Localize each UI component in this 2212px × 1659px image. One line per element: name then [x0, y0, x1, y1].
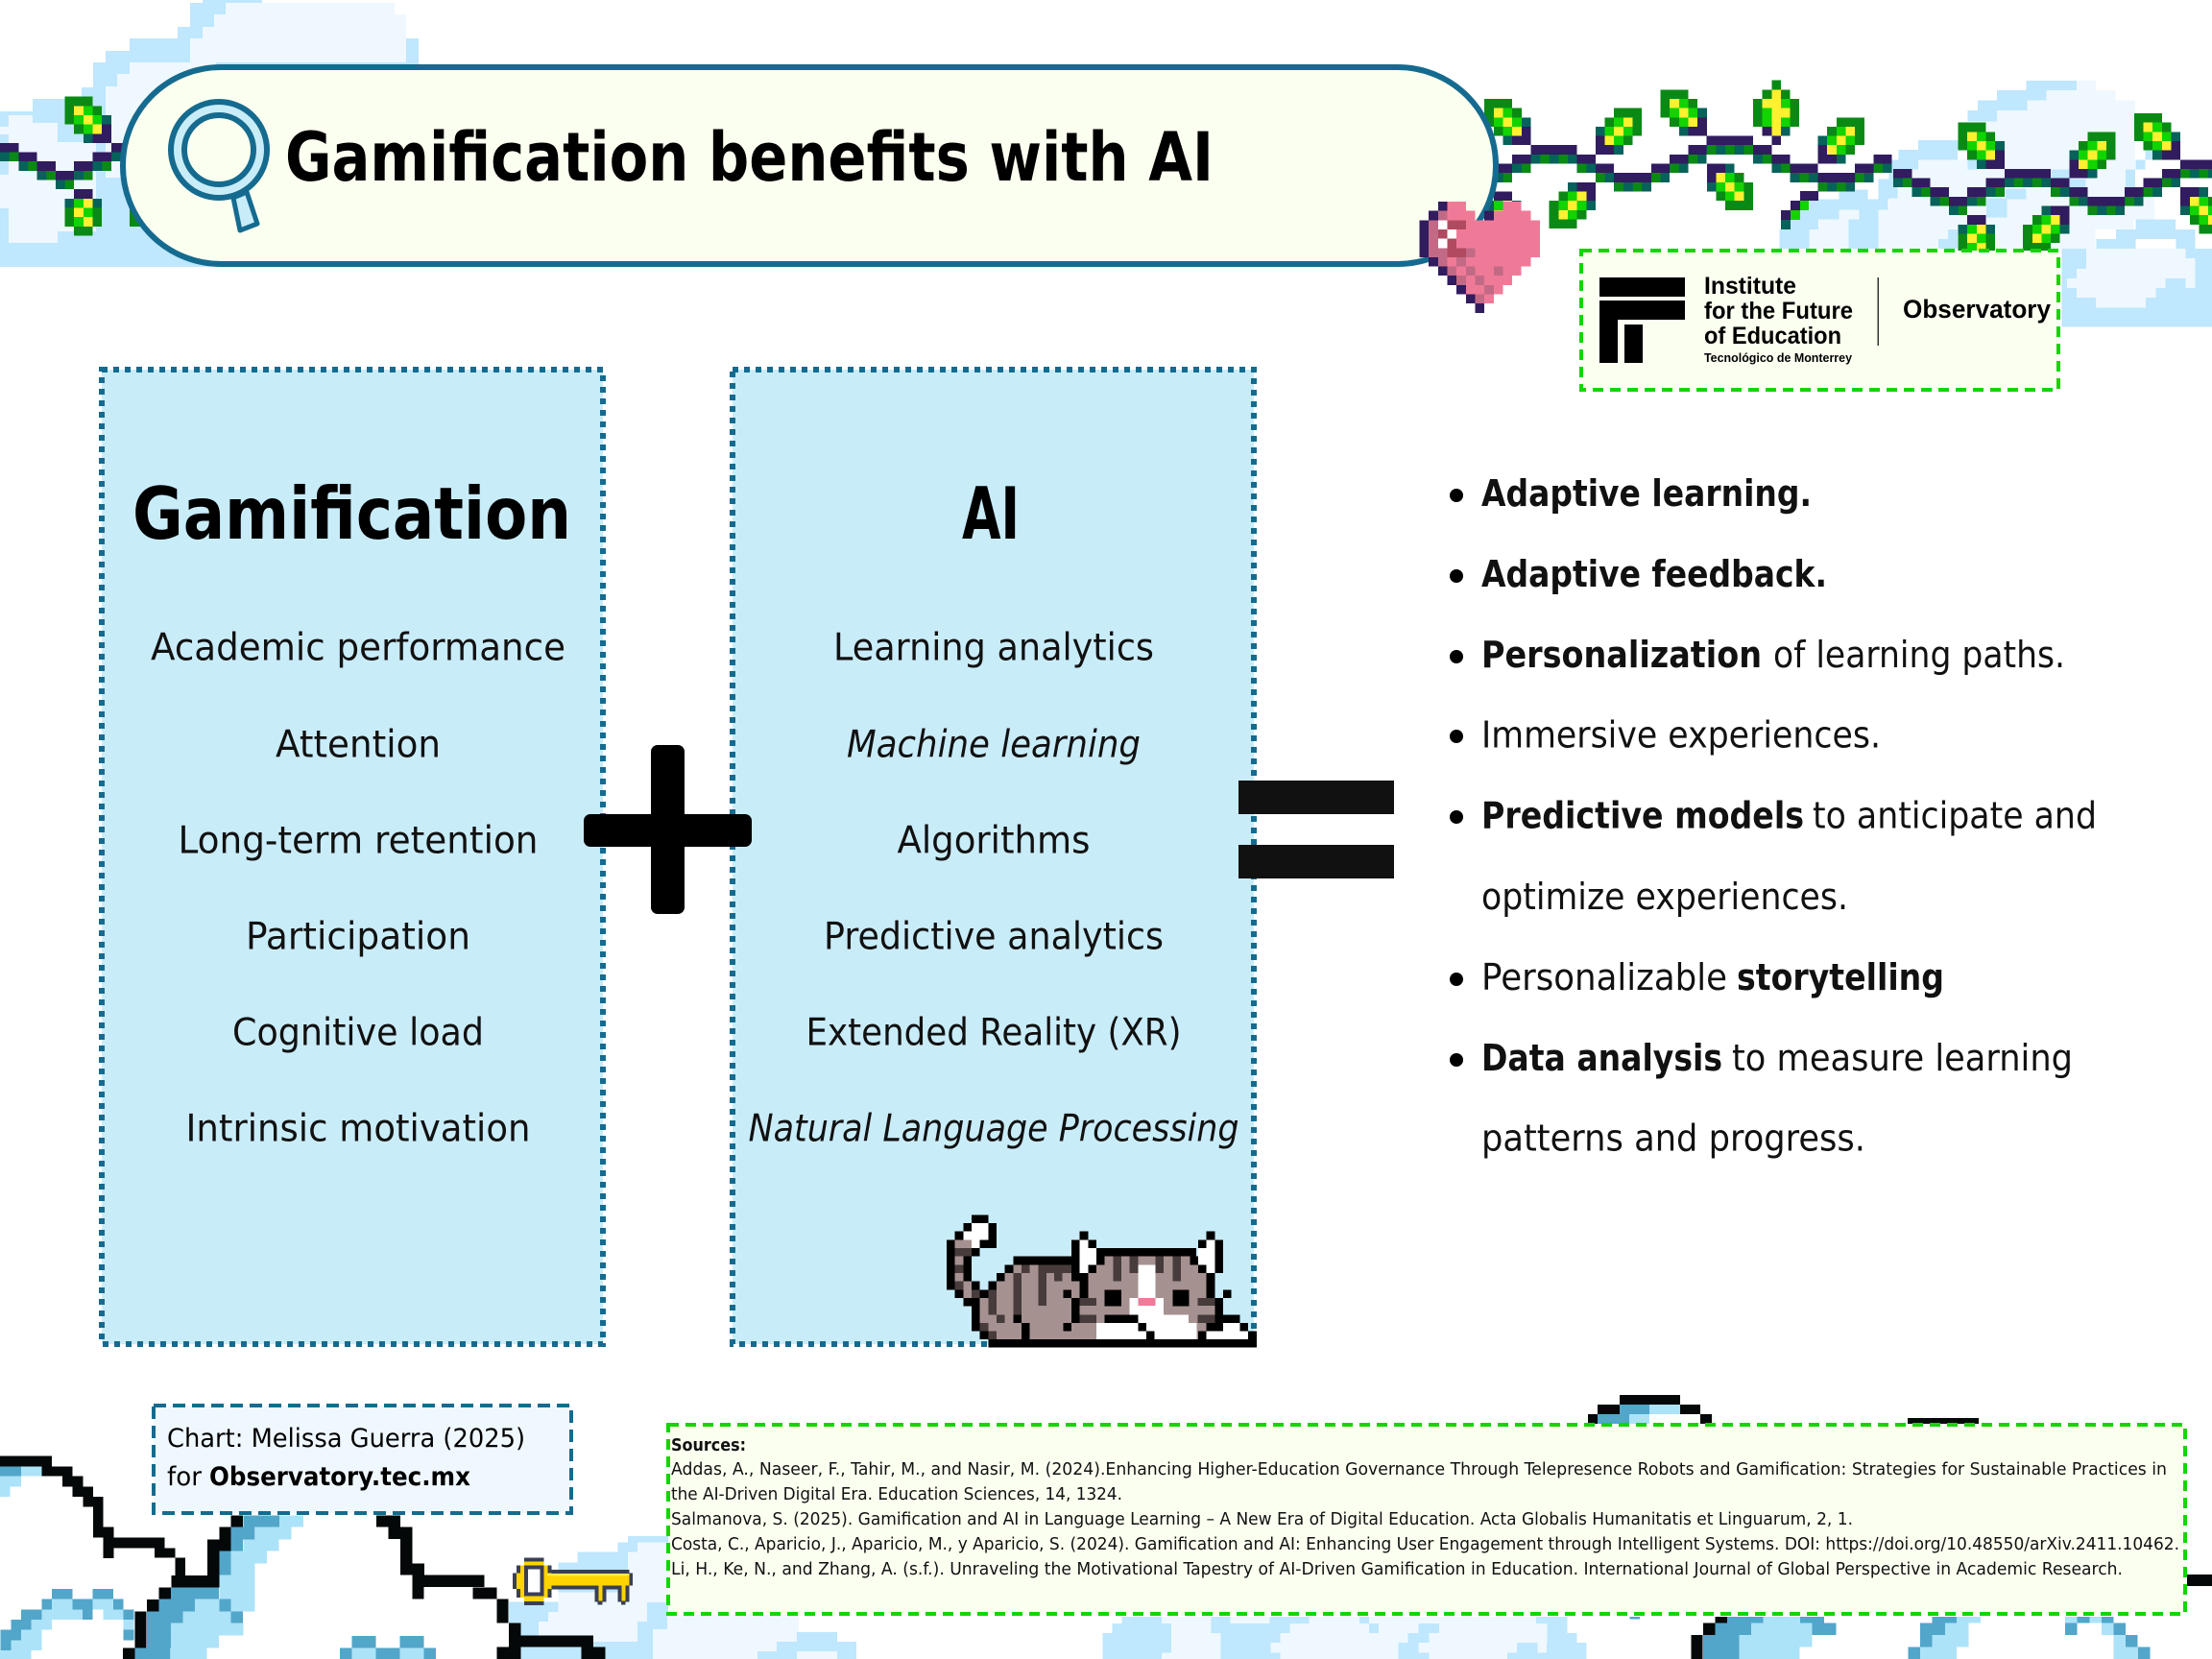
title banner	[123, 67, 1496, 264]
list: benefits: Personalizable	[1481, 956, 1727, 998]
sources text: Li, H., Ke, N., and Zhang, A. (s.f.). Unraveling the Motivational Tapestry of AI-Driven Gamification in Education. International Journal of Global Perspective in Academic Research.	[671, 1560, 2123, 1579]
list: AI items: Learning analytics	[833, 626, 1154, 670]
list: benefits: optimize experiences.	[1481, 876, 1848, 918]
sources text: Salmanova, S. (2025). Gamification and AI in Language Learning – A New Era of Digital Education. Acta Globalis Humanitatis et Linguarum, 2, 1.	[671, 1510, 1853, 1529]
logo mark	[1599, 277, 1685, 363]
logo text: Institute	[1704, 273, 1796, 300]
list: AI items	[749, 626, 1238, 1150]
icon: key	[513, 1558, 633, 1605]
sources text: Addas, A., Naseer, F., Tahir, M., and Nasir, M. (2024).Enhancing Higher-Education Governance Through Telepresence Robots and Gamification: Strategies for Sustainable Practices in	[671, 1460, 2167, 1479]
vine: right	[1420, 81, 2212, 261]
cloud: top right	[1779, 81, 2212, 327]
icon: magnifying glass	[171, 102, 267, 230]
list: gamification items: Long-term retention	[179, 820, 538, 862]
sources text	[671, 1436, 2179, 1579]
icon: equals	[1238, 781, 1394, 878]
title: Gamification benefits with AI	[285, 118, 1214, 197]
icon: pixel cat	[947, 1214, 1257, 1347]
cloud: top left	[0, 0, 419, 267]
cloud: bottom middle, under key	[472, 1536, 826, 1659]
icon: plus	[584, 745, 752, 914]
heading: gamification: Gamification	[132, 471, 571, 556]
credit box: Observatory.tec.mx	[209, 1462, 470, 1492]
list: benefits: Adaptive learning.	[1481, 472, 1812, 515]
list: gamification items: Academic performance	[151, 626, 565, 670]
heading: AI: AI	[962, 471, 1020, 556]
logo box	[1581, 251, 2058, 390]
list: benefits: to anticipate and	[1813, 795, 2097, 837]
bullets	[1450, 489, 1463, 1067]
list: benefits	[1450, 472, 2097, 1160]
list: benefits: to measure learning	[1732, 1037, 2073, 1079]
list: AI items: Natural Language Processing	[749, 1108, 1238, 1150]
sources text: the AI-Driven Digital Era. Education Sciences, 14, 1324.	[671, 1485, 1122, 1504]
list: benefits: storytelling	[1737, 956, 1944, 998]
list: AI items: Algorithms	[897, 820, 1091, 862]
logo text: of Education	[1704, 323, 1841, 349]
list: benefits: patterns and progress.	[1481, 1118, 1865, 1160]
list: benefits: Adaptive feedback.	[1481, 553, 1827, 595]
cloud: bottom left, outlined	[0, 1456, 500, 1659]
list: gamification items: Intrinsic motivation	[186, 1108, 530, 1150]
list: benefits: Predictive models	[1481, 795, 1804, 837]
logo text: Tecnológico de Monterrey	[1704, 351, 1852, 365]
logo text: for the Future	[1704, 298, 1853, 325]
vine: left	[0, 78, 472, 235]
cloud: bottom strip	[653, 1615, 2150, 1659]
list: gamification items: Cognitive load	[232, 1012, 484, 1054]
cloud: peeking above sources	[1588, 1395, 2212, 1586]
list: gamification items: Participation	[246, 916, 470, 958]
icon: pixel heart	[1420, 202, 1540, 313]
credit box	[154, 1406, 571, 1513]
list: benefits: Immersive experiences.	[1481, 714, 1881, 757]
sources box	[668, 1425, 2185, 1614]
sources text: Sources:	[671, 1436, 746, 1455]
list: AI items: Extended Reality (XR)	[806, 1012, 1181, 1054]
list: AI items: Predictive analytics	[824, 916, 1164, 958]
sources text: Costa, C., Aparicio, J., Aparicio, M., y Aparicio, S. (2024). Gamification and AI: Enhancing User Engagement through Intelligent Systems. DOI: https://doi.org/10.48550/arXiv.2411.10462.	[671, 1535, 2179, 1554]
logo text: Observatory	[1903, 295, 2051, 324]
list: AI items: Machine learning	[847, 724, 1141, 766]
list: benefits: of learning paths.	[1773, 634, 2065, 676]
list: gamification items: Attention	[276, 724, 441, 766]
list: benefits: Data analysis	[1481, 1037, 1722, 1079]
list: gamification items	[151, 626, 565, 1150]
panel: AI	[733, 370, 1254, 1344]
logo text	[1704, 273, 2051, 365]
list: benefits: Personalization	[1481, 634, 1762, 676]
panel: gamification	[102, 370, 603, 1344]
credit text: Chart: Melissa Guerra (2025)	[167, 1424, 525, 1454]
credit box: for	[167, 1462, 203, 1492]
